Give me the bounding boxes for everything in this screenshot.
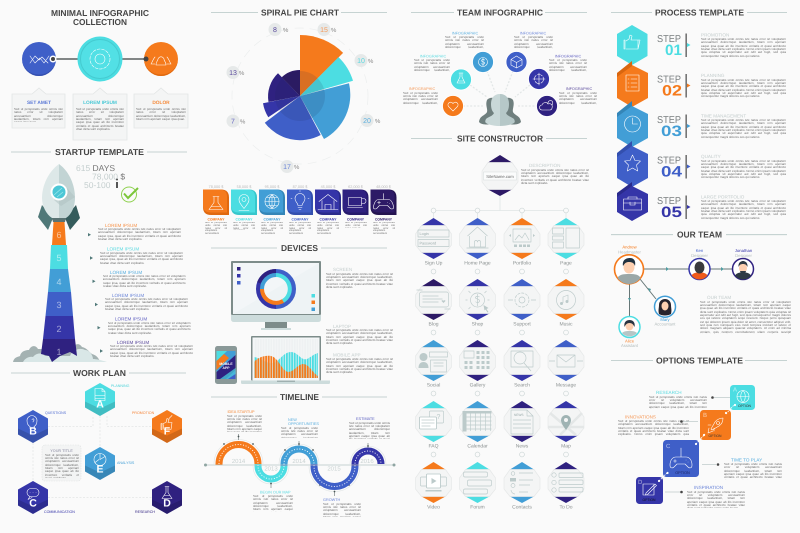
icon: cube circle <box>506 52 527 72</box>
labels: pie percentages: % <box>368 58 374 65</box>
tile: indigo house <box>315 185 341 222</box>
connectors: option links <box>658 404 736 482</box>
hex 03 <box>617 101 648 147</box>
card: forum <box>460 462 496 510</box>
hex 01 <box>617 25 648 65</box>
card: shop: Shop <box>472 322 484 328</box>
tile: blue globe <box>259 185 285 222</box>
illustration: laptop <box>241 336 330 384</box>
hexagon A: planning: A <box>96 398 104 410</box>
icon: cycle circle <box>528 68 550 90</box>
stage 3 <box>95 293 188 312</box>
option C: blue square: OPTION <box>675 471 690 475</box>
labels: work plan: QUESTIONS <box>45 411 67 415</box>
step 01: 01 <box>665 42 682 59</box>
labels: work plan: ANALYSIS <box>117 461 135 465</box>
tile: cyan pin: COMPANY <box>235 218 253 222</box>
heading: timeline: TIMELINE <box>280 392 319 402</box>
card: blog <box>416 279 452 328</box>
card: music: Music <box>559 322 573 328</box>
stage 3: LOREM IPSUM <box>112 293 144 298</box>
research <box>649 390 730 408</box>
step 03: 03 <box>661 123 682 140</box>
connectors: work plan dashes <box>33 416 152 498</box>
hexagon B: questions <box>18 410 48 443</box>
stats: days, budget, people: 615 DAYS <box>76 163 115 173</box>
chart: timeline track <box>204 434 396 496</box>
research: RESEARCH <box>656 390 682 395</box>
tile: dark cup: COMPANY <box>347 218 365 222</box>
icon: check <box>122 187 138 202</box>
row: company tiles <box>203 185 396 235</box>
tile: indigo house: COMPANY <box>319 218 337 222</box>
avatar: ken <box>689 258 710 280</box>
card: dolor: DOLOR <box>152 100 170 106</box>
mobile app: MOBILE APP <box>333 352 361 358</box>
hexagon A: planning <box>85 383 115 416</box>
tile: mid blue bulb: 87,000 $ <box>293 185 308 189</box>
title: minimal infographic collection: MINIMAL INFOGRAPHIC <box>51 8 149 18</box>
stage 6 <box>88 223 181 242</box>
block 6: INFOGRAPHIC <box>566 87 592 91</box>
callouts: option descriptions <box>618 390 782 508</box>
icon: heart circle <box>442 96 464 116</box>
org chart connectors <box>628 267 733 317</box>
stage 1: LOREM IPSUM <box>117 340 149 345</box>
labels: work plan: COMMUNICATION <box>44 510 75 514</box>
text: team infographic blocks <box>403 32 597 104</box>
inspiration: INSPIRATION <box>694 485 723 490</box>
illustration: rocket flame stack: 5 <box>56 253 62 263</box>
card: sign up: Sign Up <box>425 260 443 266</box>
avatar: mary <box>654 296 676 317</box>
hexagon C: communication <box>18 481 48 514</box>
step 05: STEP <box>657 196 681 207</box>
card: search <box>504 340 540 388</box>
step 03 <box>657 114 786 140</box>
growth: GROWTH <box>323 498 341 502</box>
hexagon E: analysis: E <box>96 464 104 476</box>
labels: pie percentages: % <box>331 27 337 34</box>
labels: work plan <box>44 384 155 514</box>
card: lorem ipsum: LOREM IPSUM <box>83 100 117 106</box>
text: our team description: OUR TEAM <box>707 295 731 300</box>
card: news <box>504 401 540 450</box>
illustration: clouds <box>13 344 107 362</box>
chart: timeline track: 2013 <box>264 466 278 472</box>
labels: team names: Headmaster <box>618 250 642 254</box>
card: to do: To Do <box>559 504 573 510</box>
hexagon F: promotion <box>152 410 182 443</box>
card: portfolio: Portfolio <box>513 260 531 266</box>
hex 02 <box>617 61 648 107</box>
card: map <box>548 401 584 450</box>
step 04: QUALITY <box>701 154 721 159</box>
card: blog: Blog <box>428 322 439 328</box>
tile: dark cup: 62,000 $ <box>348 185 364 189</box>
site root card: SiteName.com <box>486 174 514 179</box>
heading: devices: DEVICES <box>281 243 318 253</box>
card: calendar: Calendar <box>467 444 488 450</box>
labels: pie percentages: 13 <box>229 70 237 77</box>
card: forum: Forum <box>470 504 485 510</box>
block 2: INFOGRAPHIC <box>520 32 546 36</box>
estimate: ESTIMATE <box>356 417 375 421</box>
icon: team people <box>479 94 521 126</box>
stats: days, budget, people: 78,000 $ <box>92 172 125 182</box>
illustration: rocket flame stack <box>41 222 77 362</box>
card: set amet <box>12 88 65 128</box>
card: sign up: Password <box>420 242 436 246</box>
step 01: PROMOTION <box>701 32 729 38</box>
icon: coin circle <box>472 52 494 72</box>
card: support: Support <box>513 322 531 328</box>
card: music <box>548 279 584 328</box>
labels: team names: Assistant <box>621 343 639 348</box>
card: portfolio <box>504 218 540 266</box>
laptop: LAPTOP <box>333 324 351 329</box>
option D: indigo square: D <box>638 479 643 486</box>
screen: SCREEN <box>333 267 352 272</box>
new opportunities <box>281 418 319 438</box>
tile: indigo house: 45,000 $ <box>321 185 336 189</box>
avatar: andrew <box>614 255 644 284</box>
hexagon F: promotion: F <box>164 426 171 438</box>
card: video: Video <box>427 504 440 510</box>
option A: cyan square <box>730 385 755 410</box>
icon: people circle <box>144 42 178 76</box>
step 05 <box>657 194 786 221</box>
card: dolor <box>134 88 188 128</box>
tile: orange flask: COMPANY <box>207 218 225 222</box>
time to play: TIME TO PLAY <box>731 458 762 462</box>
card: to do <box>548 462 584 510</box>
heading: team infographic: TEAM INFOGRAPHIC <box>457 8 543 18</box>
labels: pie percentages: % <box>240 118 246 126</box>
block 3: INFOGRAPHIC <box>420 54 446 58</box>
card: news: NEWS <box>514 413 524 417</box>
step 01 <box>657 32 786 59</box>
hexagon C: communication: C <box>29 498 37 510</box>
tile: orange flask <box>203 185 229 222</box>
illustration: rocket body <box>38 164 80 230</box>
card: news: News <box>516 444 529 450</box>
tile: orange flask: 78,000 $ <box>209 185 224 189</box>
new opportunities: NEW <box>288 418 297 422</box>
card: home page: Home Page <box>464 260 491 266</box>
hexagon B: questions: B <box>29 426 37 438</box>
labels: pie percentages: % <box>239 70 245 77</box>
illustration: rocket flame stack: 6 <box>56 230 62 240</box>
stats: days, budget, people <box>76 163 125 190</box>
innovations <box>618 414 698 437</box>
step 04: 04 <box>661 164 683 180</box>
step 03: STEP <box>657 115 681 126</box>
chart: timeline track: 2016 <box>360 458 374 465</box>
stage 5: LOREM IPSUM <box>107 246 139 252</box>
heading: startup template: STARTUP TEMPLATE <box>55 147 144 157</box>
option D: indigo square <box>636 477 663 504</box>
card: message: Message <box>556 382 576 388</box>
card: gallery <box>460 340 496 388</box>
hexagon D: research <box>152 481 182 514</box>
step 04 <box>657 154 786 180</box>
labels: pie percentages: 17 <box>283 164 291 171</box>
illustration: rocket flame stack: 2 <box>56 324 62 334</box>
icon: gear circle <box>78 36 122 82</box>
icon: chart circle <box>22 42 56 76</box>
card: page: Page <box>560 260 572 266</box>
chart: donut <box>258 271 294 306</box>
stage 5 <box>90 246 183 266</box>
option B: orange square: B <box>703 412 707 419</box>
icon: flask circle <box>450 69 472 90</box>
heading: our team: OUR TEAM <box>677 230 722 240</box>
card: calendar <box>460 401 496 450</box>
chart: timeline track: 2014 <box>232 458 246 465</box>
idea startup: IDEA STARTUP <box>227 410 255 414</box>
hexagon E: analysis <box>85 447 115 480</box>
card: social: Social <box>427 382 440 388</box>
icon: cloud circle <box>536 96 558 116</box>
card: lorem ipsum <box>73 88 127 140</box>
step 02 <box>657 73 786 100</box>
labels: pie percentages: 8 <box>273 27 277 34</box>
panel: three circle connector <box>22 36 178 82</box>
option A: cyan square: A <box>733 386 737 394</box>
card: sign up: Login <box>420 232 429 236</box>
labels: pie percentages: 20 <box>363 118 371 125</box>
labels: pie percentages: % <box>283 27 289 34</box>
labels: pie percentages: 10 <box>357 58 365 65</box>
box: your title: YOUR TITLE <box>50 449 73 453</box>
card: shop <box>460 279 496 328</box>
card: faq: FAQ <box>428 444 439 450</box>
title: minimal infographic collection: COLLECTION <box>73 17 127 27</box>
labels: team names: Designer <box>691 253 708 258</box>
labels: team names: Mary <box>660 317 671 322</box>
hex 05 <box>617 182 648 221</box>
illustration: rocket flame stack: 3 <box>56 300 62 310</box>
illustration: phone: MOBILE <box>219 362 233 366</box>
illustration: monitor <box>231 261 321 330</box>
labels: team names: Designer <box>735 253 752 258</box>
diagram: team spokes <box>463 71 538 106</box>
step 03: TIME MANAGEMENT <box>701 114 746 118</box>
tile: dark cup <box>342 185 368 222</box>
option A: cyan square: OPTION <box>738 404 752 408</box>
tile: deep gamepad <box>370 185 396 222</box>
begin our map: BEGIN OUR MAP <box>260 490 291 494</box>
avatar: alice <box>619 316 640 338</box>
heading: spiral pie chart: SPIRAL PIE CHART <box>261 8 340 18</box>
illustration: phone <box>215 346 237 384</box>
option C: blue square: C <box>666 443 671 450</box>
tile: blue globe: 95,000 $ <box>265 185 280 189</box>
illustration: rocket flame stack: 1 <box>56 347 62 357</box>
title: minimal infographic collection <box>51 8 149 27</box>
innovations: INNOVATIONS <box>625 414 656 420</box>
hex 04 <box>617 141 648 187</box>
illustration: phone: APP <box>223 366 230 370</box>
site root card <box>482 155 518 196</box>
stage 2: LOREM IPSUM <box>115 316 147 322</box>
labels: pie percentages: % <box>375 118 381 125</box>
option D: indigo square: OPTION <box>642 498 656 502</box>
time to play <box>702 458 782 480</box>
avatar: jonathan <box>732 258 754 280</box>
card: contacts <box>504 462 540 510</box>
card: sign up <box>416 218 452 266</box>
labels: work plan: PLANNING <box>111 384 130 388</box>
card: faq <box>416 401 452 450</box>
step 02: PLANNING <box>701 73 725 78</box>
text: timeline events <box>227 410 390 516</box>
step 05: LARGE PORTFOLIO <box>701 194 745 200</box>
hexagon D: research: D <box>163 498 171 510</box>
labels: team names: Ken <box>696 248 704 253</box>
labels: team names: Alice <box>625 338 635 344</box>
process steps <box>657 32 786 221</box>
tile: deep gamepad: COMPANY <box>375 218 393 222</box>
tile: cyan pin <box>231 185 257 222</box>
connectors: site tree <box>431 196 568 457</box>
new opportunities: OPPORTUNITIES <box>288 422 319 426</box>
list: rocket stages <box>88 223 193 359</box>
legend <box>237 267 315 311</box>
stage 4: LOREM IPSUM <box>110 270 142 275</box>
labels: team names: Accountant <box>655 322 676 326</box>
block 4: INFOGRAPHIC <box>555 54 581 58</box>
card: page <box>548 218 584 266</box>
step 05: 05 <box>661 204 682 221</box>
card: gallery: Gallery <box>470 382 486 388</box>
card: video <box>416 462 452 510</box>
card: set amet: SET AMET <box>27 100 51 106</box>
card: home page <box>460 218 496 266</box>
step 01: STEP <box>657 34 681 45</box>
labels: work plan: RESEARCH <box>135 510 155 514</box>
step 02: STEP <box>657 74 681 86</box>
inspiration <box>665 485 745 508</box>
tile: cyan pin: 58,000 $ <box>237 185 252 189</box>
tile captions <box>205 222 395 235</box>
heading: work plan: WORK PLAN <box>73 368 126 378</box>
stage 2 <box>98 316 190 336</box>
card: faq: ? <box>436 414 440 421</box>
stats: days, budget, people: 50-100 <box>84 180 111 190</box>
tile: mid blue bulb: COMPANY <box>291 218 309 222</box>
card: support <box>504 279 540 328</box>
option B: orange square <box>700 410 731 440</box>
heading: process template: PROCESS TEMPLATE <box>655 8 744 18</box>
labels: team names <box>618 244 753 348</box>
heading: site constructor: SITE CONSTRUCTOR <box>457 134 544 144</box>
box: your title <box>42 445 81 481</box>
card: message <box>548 340 584 388</box>
labels: pie percentages: 15 <box>320 27 328 34</box>
text: device descriptions <box>326 267 393 375</box>
labels: pie percentages <box>226 23 381 173</box>
stage 6: LOREM IPSUM <box>105 223 137 228</box>
option B: orange square: OPTION <box>708 434 722 438</box>
block 1: INFOGRAPHIC <box>452 32 478 36</box>
illustration: rocket flame stack: 4 <box>56 277 62 287</box>
labels: pie percentages: 7 <box>231 118 235 126</box>
card: map: Map <box>561 444 571 450</box>
tile: blue globe: COMPANY <box>263 218 281 222</box>
card: contacts: Contacts <box>512 504 532 510</box>
step 02: 02 <box>662 82 682 100</box>
block 5: INFOGRAPHIC <box>409 87 435 91</box>
heading: options template: OPTIONS TEMPLATE <box>656 356 743 366</box>
card: social <box>416 340 452 388</box>
step 04: STEP <box>657 156 681 166</box>
option C: blue square <box>663 440 699 477</box>
labels: team names: Andrew <box>622 244 638 250</box>
chart: timeline track: 2015 <box>327 466 341 472</box>
text: description: DESCRIPTION <box>529 163 560 168</box>
card: search: Search <box>514 382 530 388</box>
tile: deep gamepad: 48,000 $ <box>376 185 392 189</box>
stage 4 <box>92 270 186 289</box>
tile: mid blue bulb <box>287 185 313 222</box>
chart: spiral pie <box>232 28 368 164</box>
labels: pie percentages: % <box>294 164 300 171</box>
chart: timeline track: 2014 <box>292 458 306 465</box>
process hexagons <box>617 25 648 221</box>
stage 1 <box>100 340 193 359</box>
labels: team names: Jonathan <box>735 248 753 253</box>
labels: work plan: PROMOTION <box>132 411 155 415</box>
